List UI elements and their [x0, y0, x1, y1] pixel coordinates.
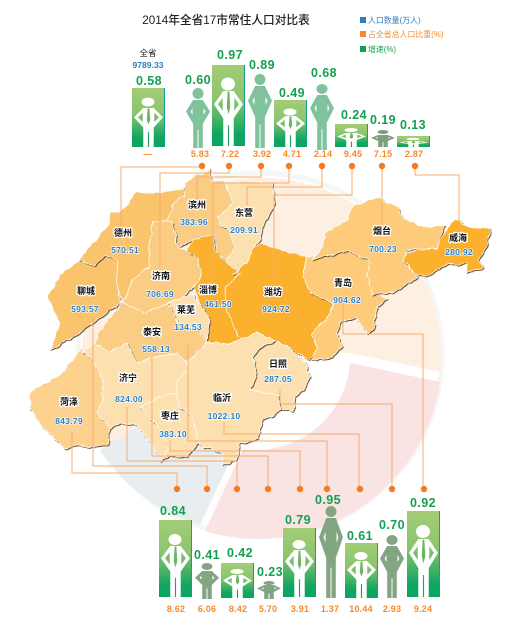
city labels: 843.79 — [55, 416, 83, 426]
city labels: 德州 — [114, 227, 132, 238]
province total figure — [132, 48, 165, 159]
background pie chart — [78, 173, 442, 539]
figure 0.68: 2.14 — [314, 149, 332, 159]
figure 0.95: 0.95 — [315, 493, 341, 507]
figure 0.68 — [310, 66, 337, 159]
figure 0.41: 0.41 — [194, 548, 220, 562]
city labels: 青岛 — [334, 277, 352, 288]
figure 0.49: 4.71 — [283, 149, 301, 159]
city labels: 558.13 — [142, 344, 170, 354]
figure 0.60: 5.83 — [191, 149, 209, 159]
connector lines — [72, 166, 459, 489]
figure 0.70: 2.93 — [383, 604, 401, 614]
region: 青岛 — [303, 250, 388, 360]
top row figures — [185, 48, 430, 159]
city labels: 济南 — [152, 270, 170, 281]
legend — [360, 15, 444, 54]
city labels: 临沂 — [213, 392, 231, 403]
figure 0.24: 9.45 — [344, 149, 362, 159]
city labels: 枣庄 — [161, 410, 179, 421]
figure 0.24 — [335, 108, 368, 159]
city labels: 700.23 — [369, 244, 397, 254]
figure 0.42: 8.42 — [229, 604, 247, 614]
figure 0.60: 0.60 — [185, 73, 211, 87]
region: 潍坊 — [225, 243, 333, 360]
figure 0.23: 5.70 — [259, 604, 277, 614]
region: 滨州 — [168, 170, 235, 260]
figure 0.89 — [248, 58, 275, 159]
pie sector: blue — [100, 400, 240, 525]
city labels: 134.53 — [174, 322, 202, 332]
figure 0.61 — [345, 529, 378, 614]
region: 德州 — [79, 188, 185, 300]
city labels: 滨州 — [188, 199, 206, 210]
figure 0.60 — [185, 73, 211, 159]
bottom row figures — [159, 493, 440, 614]
figure 0.61: 0.61 — [347, 529, 373, 543]
region: 泰安 — [95, 303, 207, 363]
legend: 人口数量(万人) — [368, 15, 421, 25]
map of cities — [30, 170, 490, 465]
figure 0.97 — [212, 48, 245, 159]
region: 淄博 — [187, 235, 240, 345]
figure 0.70: 0.70 — [379, 518, 405, 532]
city labels: 1022.10 — [208, 411, 240, 421]
city labels: 570.51 — [111, 245, 139, 255]
figure 0.70 — [379, 518, 405, 614]
region: 枣庄 — [140, 393, 198, 462]
city labels: 706.69 — [146, 289, 174, 299]
city labels: 383.10 — [159, 429, 187, 439]
region: 莱芜 — [168, 295, 210, 342]
figure 0.95: 1.37 — [321, 604, 339, 614]
title: 2014年全省17市常住人口对比表 — [142, 13, 310, 27]
city labels: 461.50 — [204, 299, 232, 309]
figure 0.84: 0.84 — [160, 504, 186, 518]
legend: 占全省总人口比重(%) — [368, 29, 444, 39]
figure 0.97: 7.22 — [221, 149, 239, 159]
legend: 增速(%) — [368, 44, 396, 54]
province total figure: 0.58 — [136, 74, 162, 88]
city labels: 潍坊 — [264, 286, 282, 297]
figure 0.42 — [221, 546, 254, 614]
city labels: 菏泽 — [60, 396, 78, 407]
city labels: 383.96 — [180, 217, 208, 227]
region: 日照 — [250, 340, 310, 412]
figure 0.89: 0.89 — [249, 58, 275, 72]
figure 0.92 — [407, 496, 440, 614]
figure 0.19: 7.15 — [374, 149, 392, 159]
city labels: 209.91 — [230, 225, 258, 235]
city labels: 聊城 — [77, 285, 95, 296]
region: 济宁 — [83, 343, 187, 458]
figure 0.61: 10.44 — [349, 604, 373, 614]
figure 0.19: 0.19 — [370, 113, 396, 127]
city labels: 泰安 — [143, 326, 161, 337]
city labels: 烟台 — [373, 225, 391, 236]
figure 0.41 — [194, 548, 220, 614]
region: 聊城 — [48, 255, 122, 350]
figure 0.84: 8.62 — [167, 604, 185, 614]
city labels: 593.57 — [71, 304, 99, 314]
figure 0.79 — [283, 513, 316, 614]
region: 东营 — [218, 181, 275, 275]
figure 0.79: 0.79 — [285, 513, 311, 527]
city labels: 济宁 — [119, 372, 137, 383]
city labels: 824.00 — [115, 394, 143, 404]
region: 烟台 — [312, 197, 445, 295]
city labels: 威海 — [449, 232, 467, 243]
pie sector: pink — [205, 363, 440, 539]
figure 0.49 — [274, 86, 307, 159]
figure 0.13 — [397, 118, 430, 159]
city labels: 日照 — [269, 359, 287, 369]
figure 0.41: 6.06 — [198, 604, 216, 614]
province total figure: — — [143, 149, 153, 159]
city labels: 280.92 — [445, 247, 473, 257]
region: 菏泽 — [30, 350, 110, 448]
region: 临沂 — [177, 333, 282, 465]
figure 0.68: 0.68 — [311, 66, 337, 80]
figure 0.95 — [315, 493, 343, 614]
region: 济南 — [122, 220, 202, 313]
province total figure: 全省 — [139, 48, 157, 58]
figure 0.42: 0.42 — [227, 546, 253, 560]
top connector dots — [199, 163, 418, 169]
city labels: 924.72 — [262, 304, 290, 314]
figure 0.13: 2.87 — [405, 149, 423, 159]
figure 0.19 — [370, 113, 396, 159]
city labels: 淄博 — [199, 284, 217, 295]
city labels: 904.62 — [333, 295, 361, 305]
city labels — [55, 199, 473, 439]
figure 0.24: 0.24 — [341, 108, 367, 122]
bottom connector dots — [174, 486, 427, 492]
figure 0.23: 0.23 — [257, 565, 283, 579]
city labels: 莱芜 — [177, 304, 195, 315]
city labels: 东营 — [235, 207, 253, 218]
figure 0.89: 3.92 — [253, 149, 271, 159]
figure 0.92: 0.92 — [410, 496, 436, 510]
region: 威海 — [403, 218, 490, 275]
figure 0.13: 0.13 — [400, 118, 426, 132]
figure 0.79: 3.91 — [291, 604, 309, 614]
figure 0.23 — [257, 565, 283, 614]
city labels: 287.05 — [264, 374, 292, 384]
pie sector: cream — [82, 178, 442, 455]
figure 0.92: 9.24 — [414, 604, 432, 614]
province total figure: 9789.33 — [132, 60, 164, 70]
figure 0.49: 0.49 — [279, 86, 305, 100]
figure 0.97: 0.97 — [217, 48, 243, 62]
figure 0.84 — [159, 504, 192, 614]
